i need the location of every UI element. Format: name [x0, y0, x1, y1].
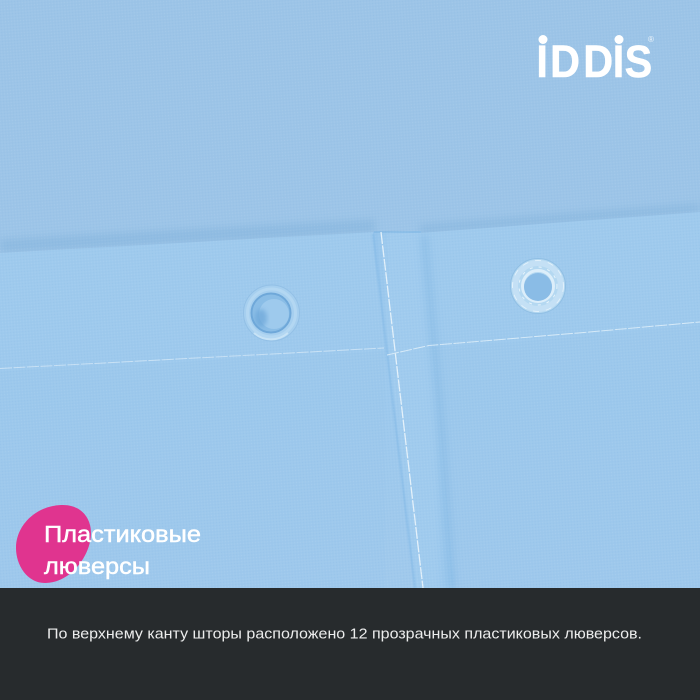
placket stitching	[381, 232, 423, 588]
bottom dark band	[0, 588, 700, 700]
heading: Пластиковые	[44, 521, 201, 547]
logo: IDDIS: ®	[648, 35, 654, 44]
pink blob accent	[16, 505, 91, 583]
horizontal stitching	[0, 322, 700, 368]
description text: По верхнему канту шторы расположено 12 прозрачных пластиковых люверсов.	[47, 626, 642, 642]
heading	[44, 521, 201, 579]
vertical placket seam	[373, 231, 455, 588]
heading: люверсы	[44, 553, 150, 579]
logo: IDDIS: IDDIS	[536, 37, 652, 87]
eyelet: right	[510, 258, 566, 314]
eyelet: left	[244, 285, 300, 341]
